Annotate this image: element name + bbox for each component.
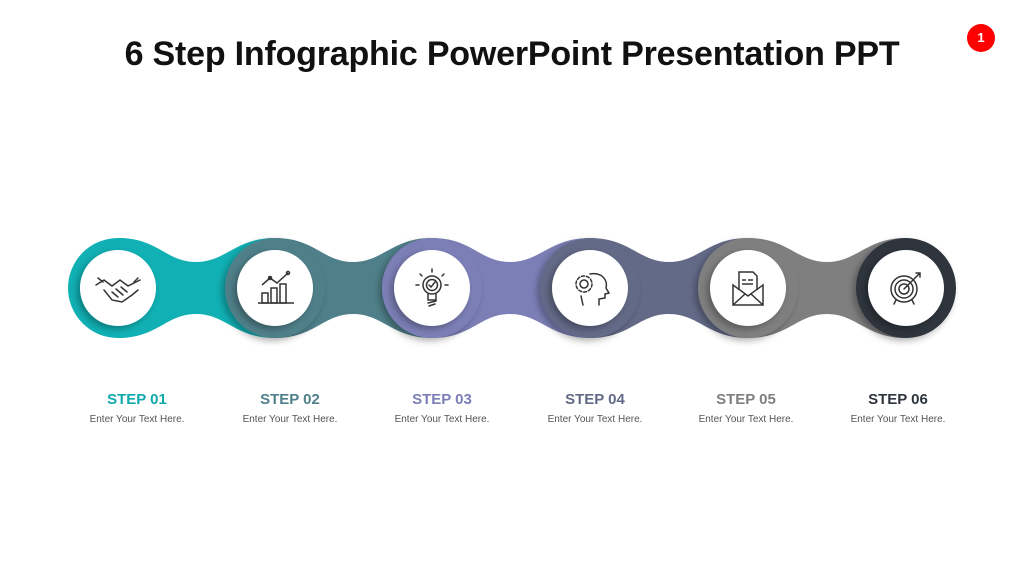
badge: 1 [977, 30, 985, 45]
step 05 label [699, 391, 793, 425]
step 04 label [548, 391, 642, 425]
step 02 label [243, 391, 337, 425]
step 02 label: Enter Your Text Here. [243, 414, 337, 425]
step 05 label: STEP 05 [716, 391, 776, 408]
step 06 label: STEP 06 [868, 391, 928, 408]
step 01 label: STEP 01 [107, 391, 167, 408]
icon: mail [733, 272, 763, 305]
icon: chart [258, 272, 294, 303]
segment 1 [68, 238, 275, 338]
icon: bulb [416, 269, 448, 306]
icon: head with gear [576, 274, 609, 305]
segment 4 [540, 238, 748, 338]
step 04 label: Enter Your Text Here. [548, 414, 642, 425]
step 06 label: Enter Your Text Here. [851, 414, 945, 425]
segment 2 [225, 238, 432, 338]
step 03 label: Enter Your Text Here. [395, 414, 489, 425]
step 06 label [851, 391, 945, 425]
step 02 label: STEP 02 [260, 391, 320, 408]
step 03 label [395, 391, 489, 425]
segment 5 [698, 238, 906, 338]
step 03 label: STEP 03 [412, 391, 472, 408]
icon: target [891, 273, 920, 304]
segment 3 [382, 238, 590, 338]
segment 6 [856, 238, 956, 338]
badge [967, 24, 995, 52]
step 05 label: Enter Your Text Here. [699, 414, 793, 425]
step 04 label: STEP 04 [565, 391, 625, 408]
icon: handshake [96, 278, 140, 302]
step 01 label [90, 391, 184, 425]
white circles [80, 250, 944, 326]
step 01 label: Enter Your Text Here. [90, 414, 184, 425]
title: 6 Step Infographic PowerPoint Presentation PPT [125, 35, 899, 73]
